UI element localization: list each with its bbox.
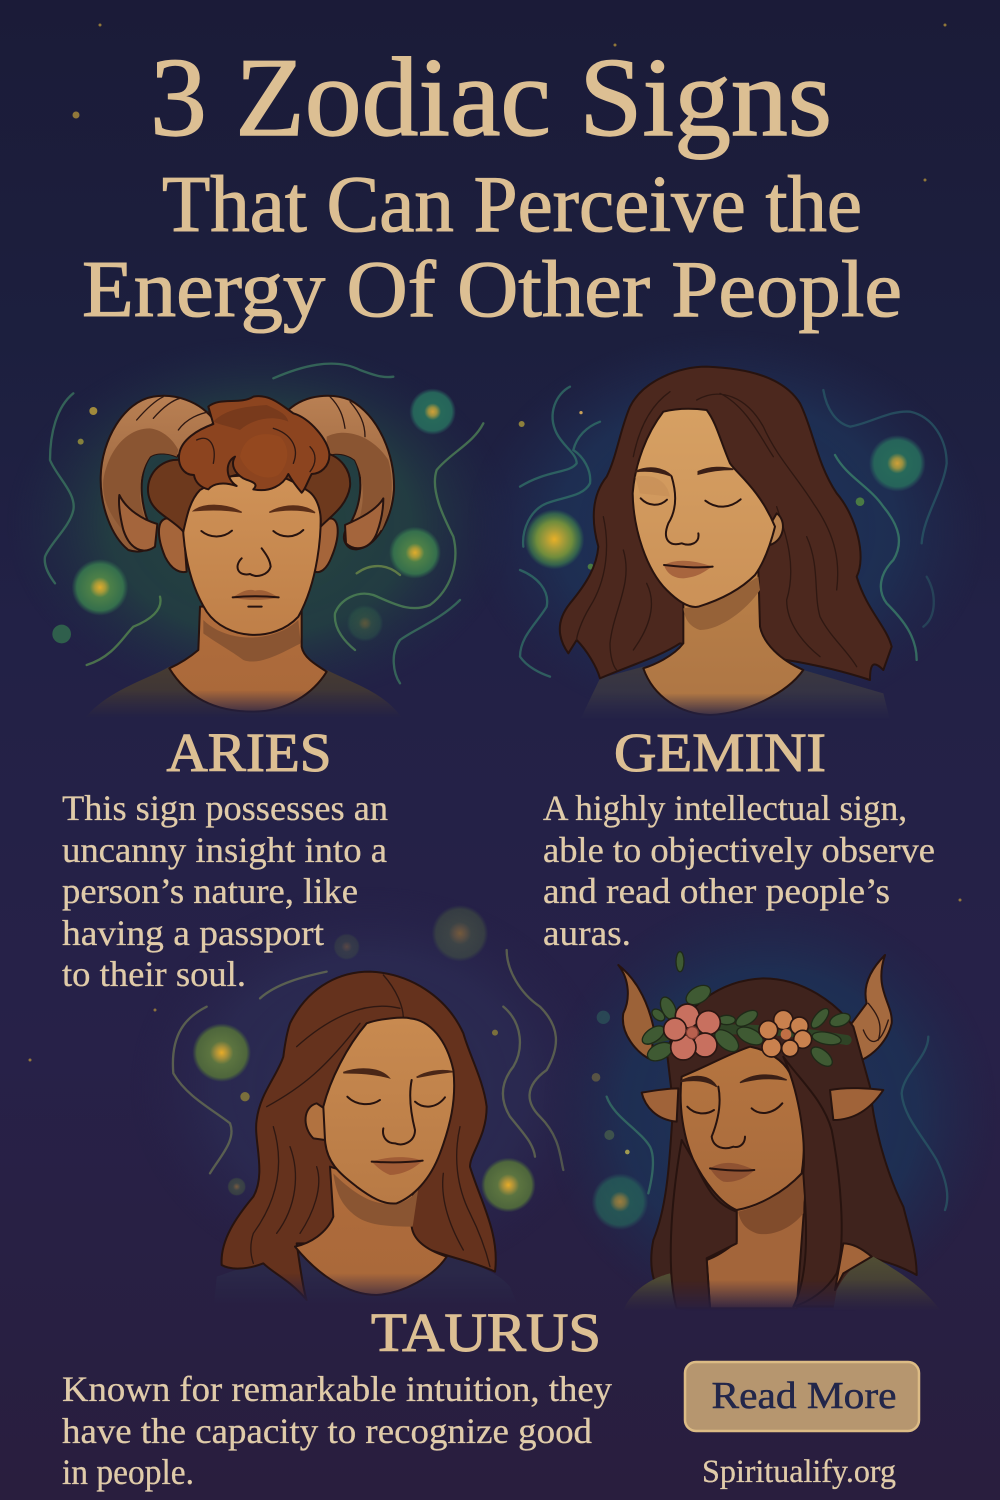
text block: Taurus description: Known for remarkable intuition, they: [62, 1369, 612, 1409]
hair: Aries: [148, 396, 350, 532]
energy wisps: crown figure: [607, 1037, 947, 1210]
energy orbs: Aries: [52, 388, 456, 643]
face: Aries: [183, 475, 321, 635]
energy wisps: Gemini: [520, 387, 947, 677]
text block: Aries description: This sign possesses an: [62, 788, 388, 828]
energy orb: crown figure: [592, 1011, 648, 1230]
neck: crown figure: [707, 1173, 872, 1308]
facial features: Taurus: [343, 1069, 453, 1175]
hair strands: Gemini: [577, 392, 857, 670]
illustration: floral crown figure: [558, 949, 948, 1308]
shirt: Gemini: [588, 666, 886, 708]
hair: crown figure: [651, 978, 917, 1307]
heading: Gemini: GEMINI: [614, 722, 826, 783]
title: [82, 36, 902, 334]
title: Energy Of Other People: [82, 246, 902, 334]
energy wisps: Taurus: [173, 950, 563, 1173]
neck: Taurus: [295, 1167, 447, 1295]
horns: Aries: [101, 396, 394, 551]
aura: crown figure: [558, 949, 941, 1238]
text block: Aries description: uncanny insight into a: [62, 830, 387, 870]
shirt: Aries: [96, 666, 393, 709]
face: crown figure: [681, 1047, 804, 1210]
source: Spiritualify.org: Spiritualify.org: [702, 1454, 896, 1490]
text block: Gemini description: [543, 788, 935, 953]
illustration: Gemini: [518, 366, 948, 716]
text block: Aries description: having a passport: [62, 913, 324, 953]
title: 3 Zodiac Signs: [150, 36, 832, 160]
neck: Gemini: [643, 570, 803, 715]
shirt: crown figure: [623, 1257, 940, 1310]
horns: crown figure: [618, 955, 892, 1064]
text block: Gemini description: auras.: [543, 913, 631, 953]
hair: Gemini: [560, 367, 892, 680]
title: That Can Perceive the: [162, 161, 862, 249]
facial features: Aries: [194, 505, 315, 607]
facial features: Gemini: [635, 468, 741, 578]
text block: Taurus description: in people.: [62, 1452, 194, 1492]
neck: Aries: [169, 607, 327, 712]
hair: Taurus: [222, 972, 496, 1300]
hair strands front: crown figure: [671, 1057, 842, 1308]
pointed ears: Aries: [119, 495, 383, 551]
neck shadow: Aries: [203, 620, 301, 662]
text block: Aries description: [62, 788, 388, 994]
face: Gemini: [633, 409, 775, 607]
text block: Gemini description: able to objectively observe: [543, 830, 935, 870]
aura: Aries: [55, 371, 465, 668]
ear: Gemini: [770, 512, 784, 546]
energy orbs: Gemini: [519, 411, 926, 570]
text block: Taurus description: [62, 1369, 612, 1492]
heading: Taurus: TAURUS: [371, 1302, 601, 1363]
flower crown: [639, 952, 852, 1070]
ear: Taurus: [306, 1103, 327, 1140]
text block: Gemini description: A highly intellectual sign,: [543, 788, 907, 828]
button: Read More: Read More: [712, 1375, 896, 1417]
text block: Gemini description: and read other people’s: [543, 871, 890, 911]
illustration: Taurus: [172, 906, 564, 1301]
face: Taurus: [323, 1018, 454, 1204]
hair strands: Taurus: [251, 975, 490, 1267]
aura: Taurus: [210, 954, 534, 1192]
shirt: Taurus: [226, 1256, 494, 1279]
text block: Taurus description: have the capacity to recognize good: [62, 1411, 592, 1451]
energy orbs: Taurus: [192, 905, 536, 1212]
illustration: Aries: [44, 362, 484, 712]
neck shadow: Taurus: [333, 1173, 418, 1227]
decorative star specks: [28, 24, 962, 1062]
ears: crown figure: [642, 1088, 883, 1122]
energy wisps: Aries: [45, 364, 483, 683]
human ears: Aries: [159, 518, 338, 572]
button: Read More: [685, 1362, 919, 1431]
aura: Gemini: [524, 367, 929, 668]
heading: Aries: ARIES: [166, 722, 332, 783]
text block: Aries description: person’s nature, like: [62, 871, 358, 911]
neck shadow: Gemini: [683, 577, 760, 630]
facial features: crown figure: [680, 1075, 787, 1182]
text block: Aries description: to their soul.: [62, 954, 246, 994]
